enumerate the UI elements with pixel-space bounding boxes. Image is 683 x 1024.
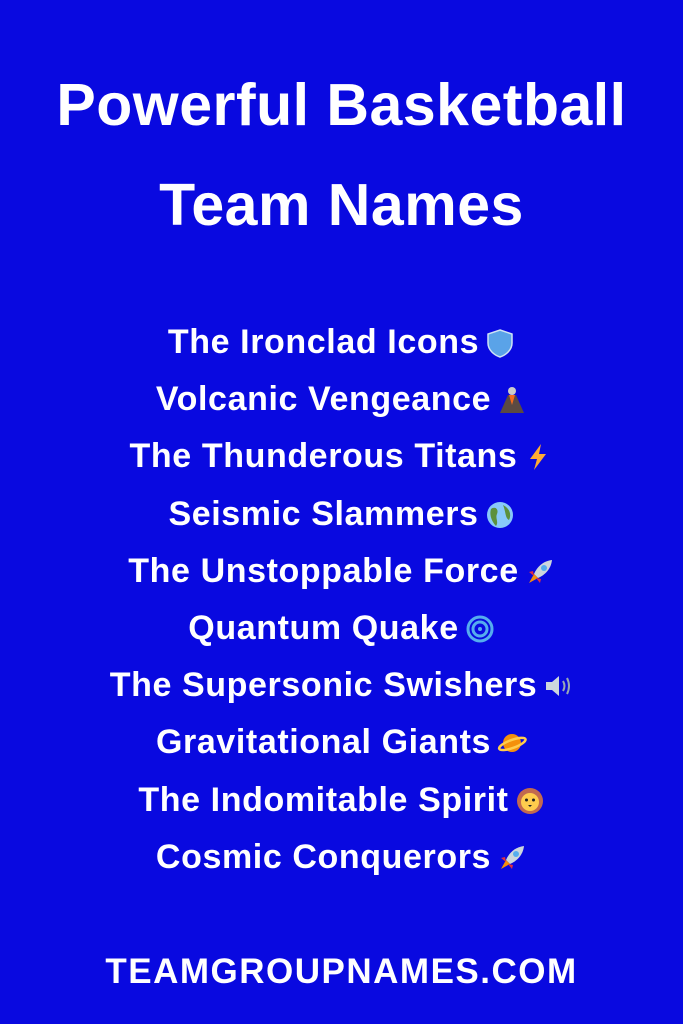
name 2: Volcanic Vengeance bbox=[156, 380, 491, 418]
name 7: The Supersonic Swishers bbox=[110, 666, 537, 704]
name 3: The Thunderous Titans bbox=[130, 437, 517, 475]
title bbox=[56, 72, 627, 238]
title: Powerful Basketball bbox=[56, 72, 627, 138]
name 4: Seismic Slammers bbox=[168, 495, 479, 533]
name 6: Quantum Quake bbox=[188, 609, 459, 647]
name 9: The Indomitable Spirit bbox=[138, 781, 509, 819]
list of team names bbox=[110, 323, 570, 876]
name 10: Cosmic Conquerors bbox=[156, 838, 491, 876]
name 1: The Ironclad Icons bbox=[168, 323, 479, 361]
footer website: TEAMGROUPNAMES.COM bbox=[105, 952, 578, 991]
title: Team Names bbox=[159, 172, 524, 238]
name 5: The Unstoppable Force bbox=[128, 552, 519, 590]
name 8: Gravitational Giants bbox=[156, 723, 491, 761]
